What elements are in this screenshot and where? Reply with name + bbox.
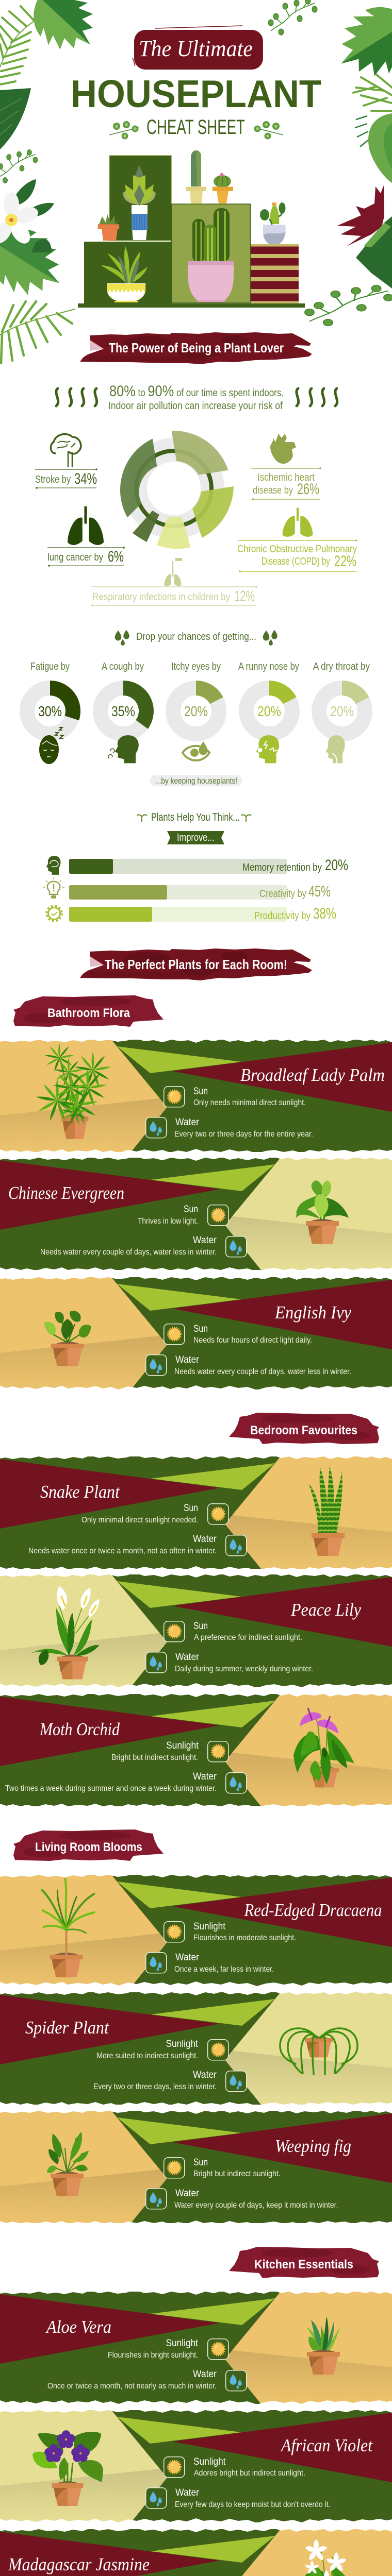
stat: respiratory infections: Respiratory infections in children by [92, 591, 230, 603]
panel: Broadleaf Lady Palm: Every two or three days for the entire year. [174, 1130, 313, 1139]
panel: Peace Lily [0, 1574, 392, 1687]
panel: Aloe Vera: Aloe Vera [45, 2317, 111, 2337]
icon: child lungs [164, 558, 182, 586]
panel: Spider Plant: Spider Plant [25, 2018, 109, 2038]
bar: productivity [46, 905, 336, 922]
panel: Snake Plant: Water [193, 1534, 217, 1545]
bar: memory: Memory retention by [242, 862, 322, 873]
stat: stroke: Stroke by [35, 474, 71, 485]
icon: heart organ [270, 434, 296, 464]
panel: Chinese Evergreen: Chinese Evergreen [8, 1183, 124, 1203]
text: indoor statistic: Indoor air pollution can increase your risk of [108, 400, 283, 412]
panel: Weeping fig: Water [175, 2188, 200, 2199]
icon: coughing head [108, 735, 139, 763]
bar: memory [46, 856, 348, 875]
stat: stroke [35, 434, 97, 489]
panel: Peace Lily: A preference for indirect sunlight. [194, 1633, 302, 1642]
title badge: The Ultimate [139, 36, 253, 61]
heading: The Power of Being a Plant Lover: The Power of Being a Plant Lover [109, 340, 284, 355]
icon: steam squiggles right [297, 388, 337, 406]
bar: creativity [43, 877, 331, 900]
chart: radial risk chart [120, 431, 234, 549]
donut: fatigue: 30% [38, 703, 62, 719]
stat: lung cancer [47, 506, 125, 567]
plant: orchid [293, 1708, 354, 1787]
icon: throat head [326, 735, 345, 764]
heading: Bedroom Favourites [229, 1413, 379, 1444]
stat: respiratory infections: 12% [234, 588, 255, 605]
plant in patterned pot [101, 246, 148, 302]
plant: lady palm [36, 1043, 111, 1139]
bar: memory: 20% [325, 857, 348, 874]
text: indoor statistic [108, 383, 284, 412]
header foliage left [0, 0, 110, 363]
panel: Madagascar Jasmine: Madagascar Jasmine [8, 2554, 150, 2574]
ribbon: improve: Improve... [177, 832, 215, 843]
text: indoor statistic: 80% to 90% of our time is spent indoors. [109, 383, 284, 400]
panel: Aloe Vera [0, 2292, 392, 2404]
panel: Weeping fig [0, 2111, 392, 2223]
panel: Red-Edged Dracaena: Flourishes in moderate sunlight. [193, 1934, 296, 1942]
panel: Weeping fig: Bright but indirect sunlight. [193, 2170, 281, 2178]
icon: lungs lime [283, 508, 313, 537]
panel: Broadleaf Lady Palm: Sun [193, 1086, 208, 1097]
donut: itchy eyes: 20% [184, 703, 208, 719]
donut: runny nose: 20% [257, 703, 281, 719]
panel: Red-Edged Dracaena [0, 1875, 392, 1987]
panel: English Ivy: Sun [193, 1324, 208, 1334]
subtitle: CHEAT SHEET [146, 116, 245, 139]
panel: Aloe Vera: Once or twice a month, not nearly as much in winter. [47, 2382, 217, 2391]
stat: ischemic heart disease: 26% [297, 481, 319, 498]
heading: Kitchen Essentials [229, 2247, 379, 2278]
donut: itchy eyes [171, 661, 223, 760]
panel: Chinese Evergreen [0, 1158, 392, 1270]
heading: Bedroom Favourites: Bedroom Favourites [250, 1423, 357, 1437]
heading: The Perfect Plants for Each Room [80, 948, 312, 980]
plant: evergreen [296, 1180, 349, 1244]
icon: lungs dark [68, 506, 104, 545]
panel: African Violet: African Violet [280, 2435, 373, 2455]
title: HOUSEPLANT [71, 72, 321, 115]
panel: Weeping fig: Water every couple of days, keep it moist in winter. [174, 2201, 338, 2210]
heading: The Power of Being a Plant Lover [80, 332, 312, 364]
plant: peace lily [29, 1586, 99, 1680]
panel: Weeping fig: Weeping fig [275, 2136, 351, 2156]
stat: COPD: Chronic Obstructive Pulmonary [237, 544, 357, 555]
panel: Snake Plant [0, 1456, 392, 1569]
panel: Snake Plant: Sun [184, 1503, 198, 1514]
header foliage right [268, 0, 392, 326]
panel: Peace Lily: Peace Lily [290, 1600, 361, 1620]
donut: fatigue: Fatigue by [30, 661, 70, 672]
tall cactus [186, 150, 206, 204]
bar chart: cognition [43, 856, 348, 922]
stat: respiratory infections [91, 558, 257, 606]
panel: Aloe Vera: Sunlight [166, 2338, 199, 2349]
icon: sleeping head [39, 727, 63, 764]
icon: eye with tear [183, 741, 209, 760]
panel: Peace Lily: Water [175, 1652, 200, 1663]
panel: English Ivy: Needs water every couple of days, water less in winter. [174, 1367, 351, 1376]
donut: fatigue [27, 661, 80, 764]
panel: African Violet: Adores bright but indirect sunlight. [194, 2469, 305, 2478]
panel: English Ivy: Needs four hours of direct light daily. [193, 1336, 312, 1345]
ribbon: improve [167, 831, 224, 844]
bar: productivity: Productivity by [254, 910, 311, 922]
plant: ivy [44, 1311, 91, 1366]
panel: English Ivy: Water [175, 1354, 200, 1365]
panel: Broadleaf Lady Palm: Water [175, 1117, 200, 1128]
bar: creativity: Creativity by [259, 888, 306, 900]
round cactus [213, 173, 233, 204]
donut: cough [100, 661, 154, 763]
plant: weeping fig [47, 2132, 89, 2196]
panel: Moth Orchid: Sunlight [166, 1740, 199, 1751]
terracotta pot with succulent [98, 214, 119, 241]
panel: Red-Edged Dracaena: Once a week, far less in winter. [174, 1965, 274, 1974]
donut: dry throat: 20% [330, 703, 354, 719]
stat: COPD [237, 508, 357, 572]
donut: runny nose: A runny nose by [238, 661, 299, 672]
plant: snake plant [309, 1466, 345, 1556]
panel: Weeping fig: Sun [193, 2157, 208, 2168]
stat: ischemic heart disease: Ischemic heart [257, 472, 315, 483]
panel: African Violet: Water [175, 2487, 200, 2498]
panel: African Violet: Every few days to keep moist but don't overdo it. [175, 2500, 330, 2509]
heading: Living Room Blooms [13, 1829, 164, 1861]
panel: Chinese Evergreen: Needs water every couple of days, water less in winter. [40, 1248, 217, 1257]
panel: Moth Orchid: Water [193, 1771, 217, 1782]
panel: Snake Plant: Needs water once or twice a month, not as often in winter. [28, 1547, 217, 1555]
panel: Broadleaf Lady Palm [0, 1040, 392, 1152]
panel: African Violet [0, 2410, 392, 2522]
panel: Peace Lily: Daily during summer, weekly during winter. [175, 1665, 313, 1673]
heading: drop your chances [115, 630, 277, 646]
heading: Kitchen Essentials: Kitchen Essentials [254, 2258, 353, 2272]
heading: The Perfect Plants for Each Room: The Perfect Plants for Each Room! [105, 957, 287, 972]
icon: steam squiggles left [56, 388, 97, 406]
heading: Living Room Blooms: Living Room Blooms [35, 1840, 142, 1854]
stat: lung cancer: 6% [108, 548, 124, 565]
heading: drop your chances: Drop your chances of getting... [136, 631, 256, 642]
donut: dry throat: A dry throat by [313, 661, 370, 672]
small cactus in lavender pot [260, 202, 286, 244]
bar: productivity: 38% [313, 905, 336, 922]
stat: COPD: 22% [334, 553, 356, 570]
panel: Red-Edged Dracaena: Sunlight [193, 1921, 226, 1932]
panel: Red-Edged Dracaena: Water [175, 1952, 200, 1963]
heading: Bathroom Flora: Bathroom Flora [47, 1006, 130, 1020]
cactus group in pink pot [188, 208, 234, 302]
donut: dry throat [313, 661, 370, 764]
plant: jasmine [299, 2539, 360, 2576]
panel: Chinese Evergreen: Sun [184, 1204, 198, 1215]
shelf illustration [78, 150, 305, 308]
panel: Spider Plant: More suited to indirect sunlight. [96, 2052, 198, 2060]
panel: Aloe Vera: Water [193, 2369, 217, 2380]
panel: Broadleaf Lady Palm: Only needs minimal direct sunlight. [193, 1098, 306, 1107]
panel: Moth Orchid: Moth Orchid [39, 1719, 120, 1739]
plant: aloe [307, 2316, 340, 2375]
plant: african violet [32, 2430, 103, 2506]
succulent in blue vase [123, 165, 156, 240]
heading: Bathroom Flora [13, 995, 164, 1027]
panel: Spider Plant [0, 1992, 392, 2105]
panel: Moth Orchid: Two times a week during summer and once a week during winter. [5, 1784, 217, 1793]
panel: English Ivy: English Ivy [274, 1302, 351, 1323]
donut: cough: A cough by [102, 661, 144, 672]
panel: Chinese Evergreen: Water [193, 1235, 217, 1246]
panel: Aloe Vera: Flourishes in bright sunlight. [108, 2351, 198, 2360]
stat: ischemic heart disease: disease by [253, 485, 293, 496]
bar: creativity: 45% [308, 883, 331, 900]
panel: Moth Orchid: Bright but indirect sunlight. [111, 1753, 198, 1762]
panel: Snake Plant: Snake Plant [40, 1482, 120, 1502]
donut: cough: 35% [111, 703, 135, 719]
panel: Broadleaf Lady Palm: Broadleaf Lady Palm [240, 1065, 385, 1085]
panel: Madagascar Jasmine [0, 2529, 392, 2576]
stat: stroke: 34% [74, 470, 97, 487]
panel: Spider Plant: Water [193, 2070, 217, 2080]
callout: by keeping houseplants: ...by keeping houseplants! [155, 776, 237, 786]
heading: plants help you think: Plants Help You Think... [151, 811, 240, 823]
panel: Spider Plant: Sunlight [166, 2039, 199, 2049]
panel: English Ivy [0, 1277, 392, 1389]
icon: head with headache [256, 735, 279, 763]
title badge [133, 26, 263, 70]
panel: Spider Plant: Every two or three days, less in winter. [93, 2082, 217, 2091]
donut: itchy eyes: Itchy eyes by [171, 661, 221, 672]
panel: Moth Orchid [0, 1694, 392, 1806]
stat: ischemic heart disease [251, 434, 321, 500]
stat: lung cancer: lung cancer by [47, 552, 103, 563]
panel: Snake Plant: Only minimal direct sunlight needed. [81, 1516, 198, 1524]
panel: Chinese Evergreen: Thrives in low light. [138, 1217, 198, 1226]
plant: dracaena [42, 1879, 94, 1977]
stat: COPD: Disease (COPD) by [262, 556, 330, 567]
plant: spider plant [280, 2028, 357, 2074]
panel: Peace Lily: Sun [193, 1621, 208, 1632]
icon: brain [51, 434, 81, 467]
panel: African Violet: Sunlight [193, 2456, 226, 2467]
donut: runny nose [238, 661, 299, 763]
